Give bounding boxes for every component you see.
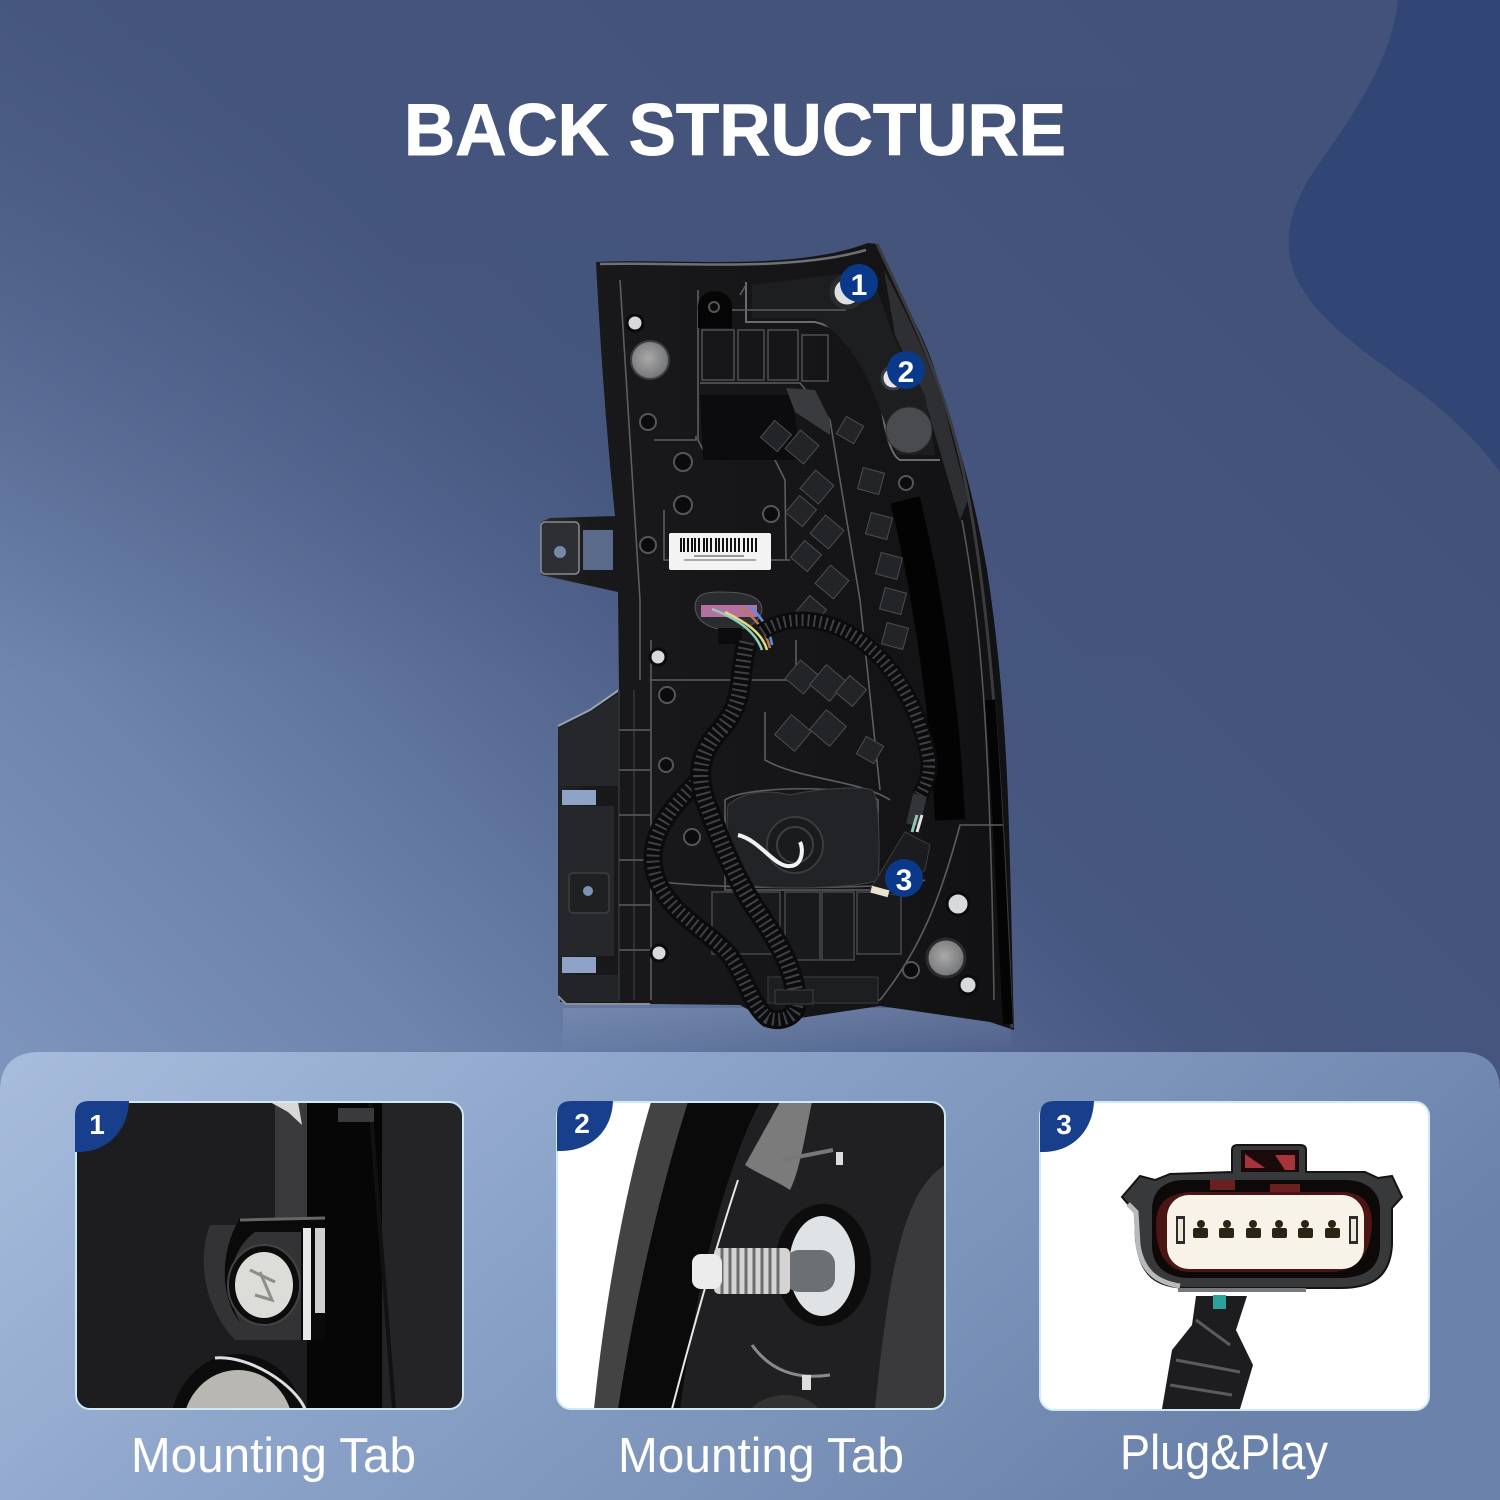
number tag 1 — [75, 1101, 129, 1152]
threaded stud — [714, 1248, 790, 1294]
number tag 3 — [1040, 1101, 1094, 1152]
lower left wing — [558, 690, 651, 1004]
shell left highlight — [1128, 1204, 1180, 1286]
vertical panel ribs — [620, 280, 1003, 1000]
glossy upper band — [884, 270, 968, 520]
card 1: mounting tab photo: 1 — [89, 1109, 105, 1140]
label 3: Plug&Play — [1120, 1426, 1328, 1480]
card 2: mounting tab stud photo — [556, 1101, 946, 1410]
round plug — [173, 1354, 303, 1408]
end connector — [870, 832, 930, 895]
housing silhouette — [541, 243, 1014, 1030]
top highlight — [600, 250, 866, 265]
stud 1 white — [832, 277, 862, 307]
white insert — [1167, 1195, 1364, 1269]
cover plate — [727, 788, 879, 888]
product: tail light back — [541, 243, 1014, 1030]
upper clip row — [702, 330, 828, 381]
decorative blob top right — [1289, 0, 1500, 472]
bottom clip row — [712, 892, 901, 960]
stud 2 white — [882, 367, 904, 389]
upper mounting rib — [746, 282, 940, 460]
dark pocket — [700, 395, 800, 460]
label 1: Mounting Tab — [131, 1429, 416, 1483]
card 3: plug connector photo: 3 — [1056, 1109, 1072, 1140]
chrome hinge — [303, 1228, 311, 1340]
white-ridge accent — [786, 388, 830, 435]
number tag 2 — [557, 1101, 613, 1151]
bottom panel — [0, 1052, 1500, 1500]
card 3: plug connector photo — [1040, 1101, 1429, 1410]
LED diamonds — [761, 416, 908, 764]
connector shell — [1122, 1145, 1402, 1288]
badge 1: 1 — [851, 269, 867, 302]
card 2: mounting tab stud photo: 2 — [574, 1108, 590, 1139]
corrugated cables — [653, 620, 929, 1019]
barcode label — [669, 533, 771, 570]
label 2: Mounting Tab — [618, 1429, 904, 1483]
badge 1 — [840, 264, 878, 302]
badge 3 — [885, 859, 923, 897]
dark studs — [640, 302, 919, 978]
cable clip — [775, 990, 813, 1004]
outer lens edge — [877, 244, 1012, 1028]
screw head — [228, 1245, 300, 1325]
product reflection — [563, 1008, 1012, 1052]
side tab — [541, 522, 613, 574]
card 1: mounting tab photo — [75, 1101, 464, 1410]
wrapped cable — [1162, 1296, 1253, 1409]
six pins — [1193, 1220, 1340, 1238]
bottom bracket — [768, 977, 878, 1003]
badge 3: 3 — [896, 864, 912, 897]
title: BACK STRUCTURE — [404, 90, 1066, 171]
badge 2: 2 — [898, 356, 914, 389]
badge 2 — [887, 351, 925, 389]
silver screws — [627, 315, 977, 994]
harness connector — [695, 592, 772, 650]
grey plugs — [631, 341, 669, 379]
